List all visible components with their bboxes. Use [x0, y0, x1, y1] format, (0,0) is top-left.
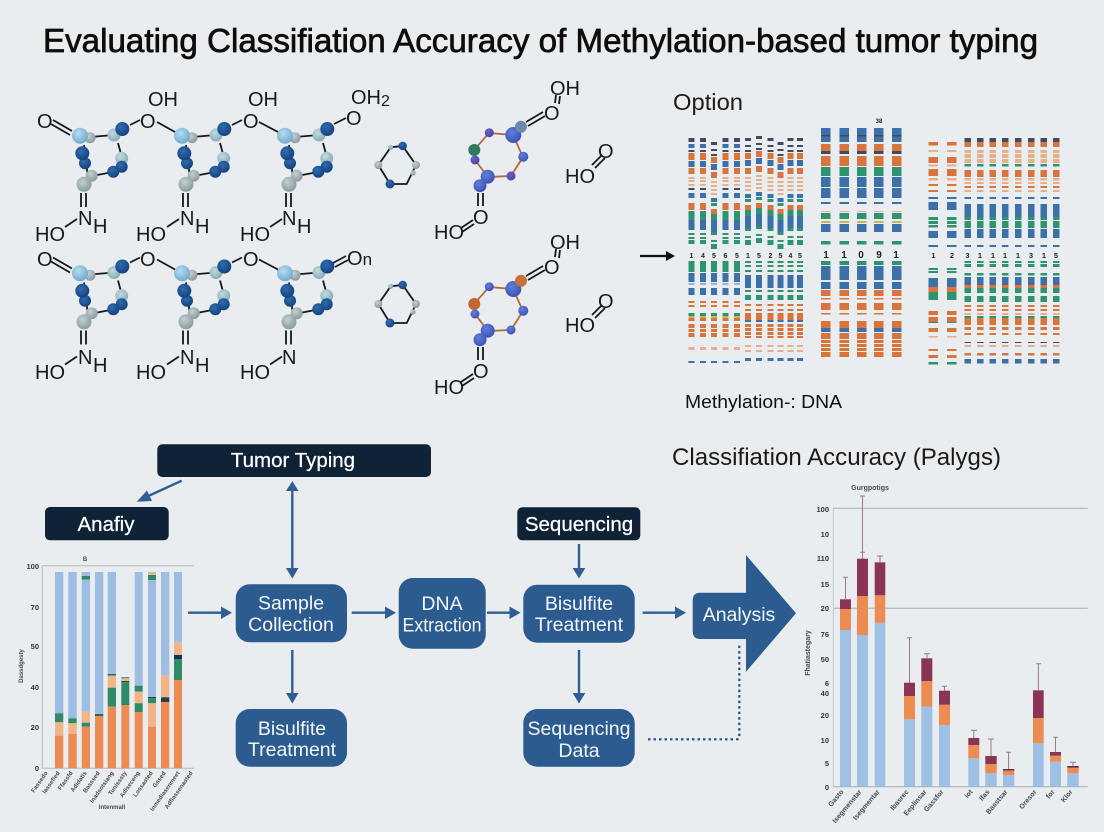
- large ring top: O: [544, 103, 560, 125]
- heatmap group C: 2: [950, 251, 954, 260]
- error bars: [843, 496, 1076, 769]
- heatmap group B: 9: [876, 250, 882, 261]
- molecule row 1: N: [78, 208, 92, 230]
- heatmap group C: [928, 138, 1060, 364]
- heatmap group C: 1: [931, 251, 936, 260]
- group 4 bars: [1033, 690, 1079, 787]
- molecule row 2: H: [195, 355, 209, 377]
- molecule row 1: H: [93, 216, 107, 238]
- heatmap group C: 1: [978, 251, 982, 260]
- category labels: Gasto: [827, 789, 846, 808]
- heatmap group C: 1: [991, 251, 995, 260]
- axis ticks: 20: [31, 723, 39, 732]
- arrow: chart to sample collection: [188, 606, 232, 619]
- dotted connector: sequencing data to analysis: [648, 643, 739, 739]
- box: bisulfite treatment right: Treatment: [535, 614, 624, 636]
- heading: option: Option: [673, 89, 743, 115]
- group 1 bars: [840, 559, 885, 787]
- heatmap group C: 3: [965, 251, 970, 260]
- box: DNA extraction: [399, 578, 486, 649]
- molecule row 1: N: [282, 208, 296, 230]
- heatmap group A: 5: [779, 253, 783, 260]
- molecule row 1: H: [195, 216, 209, 238]
- chart titles: Fhatiastegary: [805, 630, 812, 676]
- category labels: [31, 770, 195, 813]
- heatmap group A: 4: [789, 253, 793, 260]
- box: DNA extraction: DNA: [421, 593, 463, 615]
- axis ticks: [26, 562, 39, 773]
- box: bisulfite treatment left: Treatment: [248, 739, 337, 761]
- box: sequencing label: [517, 507, 640, 540]
- molecule row 2: HO: [240, 362, 270, 384]
- large ring bottom: O: [473, 361, 489, 383]
- chart: right stacked bars: [805, 485, 1088, 825]
- panel: workflow: [45, 444, 796, 767]
- category labels: iot: [964, 788, 975, 800]
- panel: molecular structures: [35, 78, 614, 399]
- large ring top: [434, 78, 614, 244]
- molecule row 1: H: [297, 216, 311, 238]
- box: sequencing label: Sequencing: [525, 513, 633, 536]
- box: analysis label: [45, 507, 169, 540]
- arrow: analysis block: [693, 555, 796, 672]
- heatmap group A: [688, 136, 803, 363]
- large ring bottom: HO: [565, 315, 595, 337]
- axis titles: [19, 557, 125, 811]
- category labels: Fassedo: [31, 770, 50, 794]
- chart: left stacked bars: [19, 557, 195, 813]
- heatmap group A: 1: [690, 253, 694, 260]
- molecule row 1: N: [180, 208, 194, 230]
- category labels: [827, 788, 1075, 825]
- heatmap group A: 4: [701, 253, 705, 260]
- arrow: DNA to bisulfite: [487, 606, 520, 619]
- heatmap group A: 6: [724, 253, 728, 260]
- large ring top: HO: [565, 166, 595, 188]
- axis ticks: 10: [821, 736, 829, 745]
- category labels: Ffassfd: [57, 770, 75, 792]
- axis ticks: 100: [816, 505, 829, 514]
- axis ticks: [816, 505, 829, 792]
- box: tumor typing: Tumor Typing: [231, 449, 355, 472]
- large ring bottom: O: [598, 291, 614, 313]
- box: sample collection: [236, 584, 347, 642]
- heatmap group B: [821, 119, 902, 357]
- box: tumor typing: [157, 444, 431, 477]
- large ring bottom: HO: [434, 377, 464, 399]
- axis ticks: 5: [825, 759, 829, 768]
- molecule row 1: OH: [351, 87, 381, 109]
- heatmap group B: 1: [841, 250, 847, 261]
- heatmap group C: 1: [1042, 251, 1046, 260]
- large ring top: OH: [550, 78, 580, 100]
- axis ticks: 40: [31, 683, 39, 692]
- molecule row 1: O: [37, 111, 53, 133]
- heatmap group A: 1: [746, 253, 750, 260]
- arrow: tumor typing to sample collection: [286, 481, 298, 578]
- axis ticks: 0: [35, 764, 39, 773]
- molecule row 2: N: [78, 347, 92, 369]
- category labels: Eeplinsar: [903, 789, 929, 817]
- molecule row 2: O: [140, 249, 156, 271]
- axis ticks: 50: [31, 642, 39, 651]
- panel: methylation heatmap: [688, 119, 1060, 364]
- heatmap group B: 0: [858, 250, 864, 261]
- heatmap group A: 2: [769, 253, 773, 260]
- category labels: Isegmenstar: [832, 789, 864, 825]
- arrow: sample to DNA: [352, 606, 396, 619]
- category labels: Tunisssty: [108, 770, 129, 797]
- category labels: for: [1045, 789, 1057, 800]
- label: methylation DNA: Methylation-: DNA: [685, 392, 842, 412]
- large ring bottom: OH: [550, 232, 580, 254]
- bars: [55, 572, 182, 768]
- molecule row 2: H: [93, 355, 107, 377]
- arrow: bisulfite to analysis: [643, 606, 686, 619]
- large ring top: O: [598, 141, 614, 163]
- arrow: molecules to heatmap: [640, 251, 675, 261]
- molecule row 1: HO: [136, 224, 166, 246]
- box: analysis label: Anafiy: [78, 513, 135, 536]
- arrow: sample to bisulfite treatment: [286, 650, 298, 704]
- axis ticks: 50: [821, 655, 829, 664]
- category labels: Adfiassenasted: [164, 770, 195, 810]
- molecule row 2: N: [180, 347, 194, 369]
- small ring bottom: [374, 281, 420, 328]
- molecule row 2: HO: [136, 362, 166, 384]
- molecule row 1: HO: [35, 224, 65, 246]
- box: sequencing data: Sequencing: [527, 718, 631, 740]
- arrow: sequencing to bisulfite: [573, 544, 585, 578]
- heatmap group C: 1: [1016, 251, 1020, 260]
- group 2 bars: [904, 658, 950, 787]
- category labels: Iassefied: [42, 770, 62, 795]
- axis ticks: 70: [31, 603, 39, 612]
- large ring top: O: [473, 207, 489, 229]
- molecule row 1: [35, 87, 390, 246]
- axis titles: Intenmall: [99, 805, 125, 811]
- category labels: Gassfor: [923, 789, 946, 814]
- box: DNA extraction: Extraction: [402, 614, 482, 636]
- heatmap group B: 38: [876, 119, 883, 125]
- category labels: Basstsar: [985, 789, 1010, 816]
- title: Evaluating Classifiation Accuracy of Methylation-based tumor typing: [43, 22, 1038, 59]
- molecule row 2: N: [282, 347, 296, 369]
- molecule row 2: O: [37, 249, 53, 271]
- axis ticks: 6: [825, 679, 829, 688]
- small ring top: [374, 142, 420, 188]
- box: sequencing data: Data: [558, 740, 600, 762]
- chart titles: [805, 485, 889, 676]
- molecule row 2: On: [347, 248, 372, 270]
- category labels: Ifas: [978, 789, 992, 803]
- box: sample collection: Sample: [258, 592, 324, 614]
- large ring bottom: [434, 232, 614, 399]
- axis titles: B: [83, 557, 88, 563]
- molecule row 1: OH: [248, 89, 278, 111]
- molecule row 1: OH: [148, 89, 178, 111]
- molecule row 1: O: [243, 111, 259, 133]
- axis ticks: 15: [821, 580, 829, 589]
- molecule row 2: HO: [35, 362, 65, 384]
- molecule row 1: O: [346, 108, 362, 130]
- heatmap group A: 5: [757, 253, 761, 260]
- molecule row 2: O: [243, 249, 259, 271]
- heatmap group C: 1: [1003, 251, 1007, 260]
- heatmap group C: 5: [1054, 251, 1058, 260]
- category labels: Ibasrec: [889, 789, 911, 812]
- axis ticks: 110: [817, 554, 829, 563]
- arrow: bisulfite to sequencing data: [573, 650, 585, 704]
- molecule row 1: HO: [240, 224, 270, 246]
- axis ticks: 76: [821, 630, 829, 639]
- axis ticks: 20: [821, 711, 829, 720]
- large ring top: HO: [434, 222, 464, 244]
- heatmap group B: 1: [823, 250, 829, 261]
- category labels: Oresor: [1018, 789, 1039, 811]
- heatmap group A: 5: [712, 253, 716, 260]
- arrow: analysis block: Analysis: [703, 604, 776, 626]
- category labels: Inadsotsiang: [89, 770, 116, 804]
- molecule row 1: O: [140, 111, 156, 133]
- category labels: Isegmentar: [852, 789, 882, 822]
- axis ticks: 20: [821, 604, 829, 613]
- category labels: Basssed: [83, 770, 102, 794]
- box: bisulfite treatment left: Bisulfite: [258, 718, 326, 740]
- axis ticks: 100: [26, 562, 39, 571]
- heatmap group B: 1: [893, 250, 899, 261]
- category labels: Gssed: [152, 770, 168, 789]
- category labels: Inmediasenmeet: [150, 771, 182, 813]
- box: sequencing data: [523, 709, 635, 767]
- category labels: Lossasted: [133, 770, 155, 798]
- box: bisulfite treatment right: Bisulfite: [545, 593, 613, 615]
- axis ticks: 40: [821, 689, 829, 698]
- category labels: Adidatis: [70, 770, 89, 794]
- molecule row 1: 2: [381, 93, 390, 110]
- group 3 bars: [968, 738, 1014, 787]
- axis ticks: 10: [821, 530, 829, 539]
- large ring bottom: O: [544, 257, 560, 279]
- category labels: Adiseceng: [119, 770, 142, 799]
- heatmap group A: 5: [798, 253, 802, 260]
- box: bisulfite treatment right: [523, 585, 635, 643]
- axis titles: Dassdgesty: [19, 648, 25, 683]
- arrow: tumor typing to analysis: [137, 481, 182, 502]
- box: bisulfite treatment left: [236, 709, 347, 767]
- box: sample collection: Collection: [248, 614, 334, 636]
- heading: classification accuracy: Classifiation Accuracy (Palygs): [672, 444, 1001, 471]
- axis ticks: 0: [825, 783, 829, 792]
- heatmap group A: 5: [735, 253, 739, 260]
- heatmap group C: 3: [1029, 251, 1033, 260]
- category labels: Klor: [1060, 789, 1075, 804]
- chart titles: Gurgpotigs: [851, 485, 889, 492]
- molecule row 2: [35, 248, 372, 384]
